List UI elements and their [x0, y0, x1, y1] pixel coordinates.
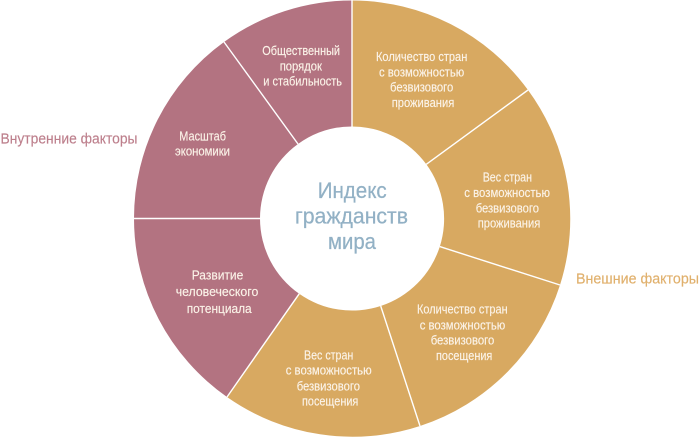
segment: weight of countries, visa-free residence: с возможностью: [464, 185, 550, 200]
segment: scale of economy: [134, 42, 298, 218]
segment: number of countries, visa-free visits: [381, 247, 560, 426]
center title: мира: [328, 229, 377, 254]
segment: number of countries, visa-free visits: с возможностью: [420, 317, 506, 332]
segment: number of countries, visa-free visits: Количество стран: [417, 302, 508, 317]
segment: number of countries, visa-free visits: безвизового: [431, 333, 494, 348]
segment: public order and stability: и стабильность: [263, 74, 342, 89]
segment: weight of countries, visa-free residence: Вес стран: [483, 170, 532, 185]
segment: scale of economy: экономики: [175, 144, 230, 159]
segment: number of countries, visa-free residence: Количество стран: [376, 49, 467, 64]
label: internal factors: Внутренние факторы: [0, 132, 138, 148]
label: external factors: Внешние факторы: [576, 272, 699, 288]
segment: weight of countries, visa-free residence: [426, 90, 570, 285]
segment: weight of countries, visa-free visits: с возможностью: [286, 363, 372, 378]
segment: weight of countries, visa-free visits: безвизового: [297, 378, 360, 393]
segment: weight of countries, visa-free residence: проживания: [478, 216, 540, 231]
segment: number of countries, visa-free residence: [352, 0, 528, 164]
segment: weight of countries, visa-free visits: [227, 294, 420, 437]
segment: weight of countries, visa-free visits: посещения: [302, 393, 358, 408]
segment: number of countries, visa-free residence: безвизового: [390, 80, 453, 95]
segment: weight of countries, visa-free residence: безвизового: [476, 200, 539, 215]
segment: weight of countries, visa-free visits: Вес стран: [304, 348, 353, 363]
segment: scale of economy: Масштаб: [179, 129, 226, 144]
segment: public order and stability: [224, 0, 352, 144]
segment: public order and stability: Общественный: [262, 43, 340, 58]
center title: Индекс: [318, 178, 387, 203]
segment: human development: человеческого: [176, 284, 258, 299]
segment: human development: [134, 218, 299, 397]
center title: гражданств: [295, 204, 408, 228]
center title: [295, 178, 408, 254]
segment: human development: Развитие: [192, 267, 243, 282]
segment: number of countries, visa-free residence: проживания: [392, 95, 454, 110]
segment: public order and stability: порядок: [280, 58, 322, 73]
segment: number of countries, visa-free visits: посещения: [436, 348, 492, 363]
segment: number of countries, visa-free residence: с возможностью: [379, 64, 465, 80]
segment: human development: потенциала: [187, 301, 252, 316]
